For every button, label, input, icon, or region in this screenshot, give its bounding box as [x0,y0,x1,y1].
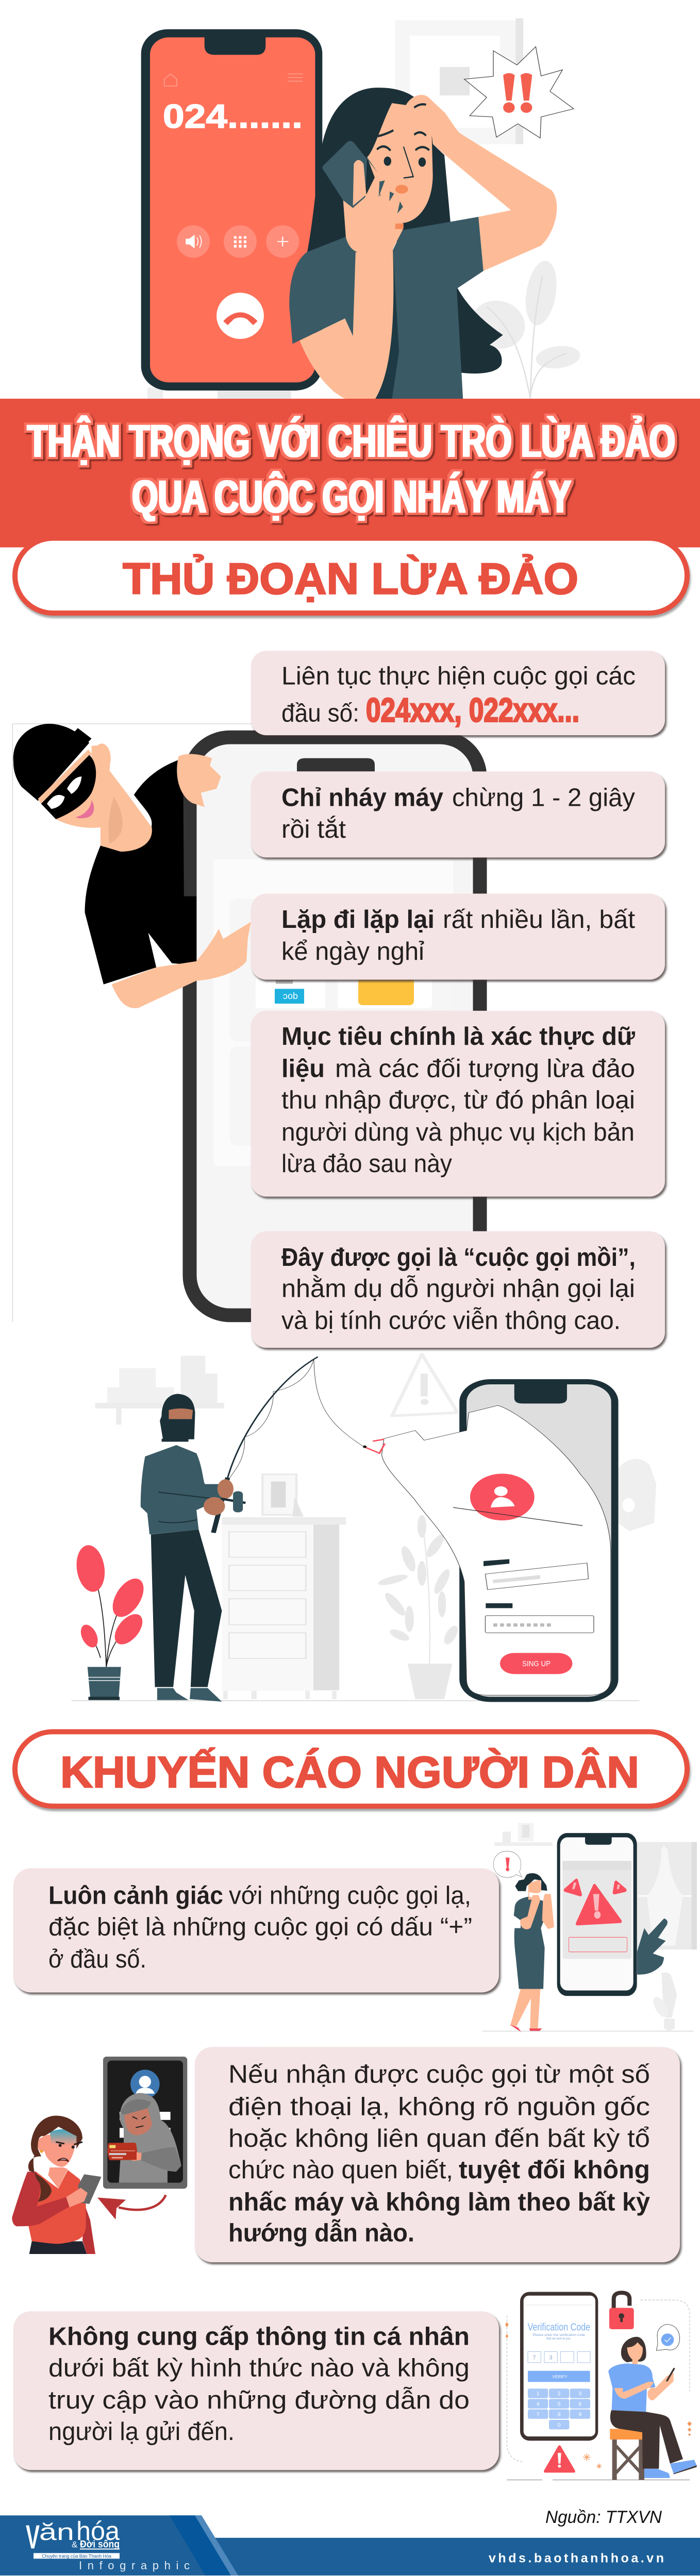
woman on the phone [289,88,557,399]
heading: scam tactics [15,538,687,613]
card: stay vigilant: Luôn cảnh giác [48,1881,223,1909]
card: unknown number warning: chức nào quen biết, [228,2155,453,2184]
card: unknown number warning: tuyệt đối không [459,2155,650,2184]
card: main goal: liệu [281,1054,325,1082]
card: unknown number warning: điện thoại lạ, không rõ nguồn gốc [228,2092,650,2121]
seated woman [507,2337,697,2480]
website url: vhds.baothanhhoa.vn [489,2551,664,2565]
card: unknown number warning: Nếu nhận được cuộc gọi từ một số [228,2060,650,2088]
source credit: Nguồn: TTXVN [545,2507,662,2527]
card: main goal: Mục tiêu chính là xác thực dữ [281,1022,635,1050]
phone with verification screen: Please enter the verification code [532,2333,585,2337]
illustration: masked thief peeking and pointing [13,724,251,1008]
illustration: scammer on tablet calling woman [12,2057,187,2254]
logo: Văn hóa & Đời sống: Chuyên trang của Báo Thanh Hóa [42,2553,111,2558]
phone with verification screen: that we sent to you [546,2337,571,2341]
logo: Văn hóa & Đời sống: V [26,2518,40,2556]
illustration: woman alarmed by phone warning [482,1823,697,2032]
arrow to victim [97,2195,166,2219]
card: main goal: mà các đối tượng lừa đảo [335,1054,635,1082]
hooked phone with peeled screen [363,1380,615,1700]
highlighted prefixes: 024xxx, 022xxx... [366,691,579,728]
logo: Văn hóa & Đời sống: ăn [39,2519,74,2545]
mirrored doc tag [275,989,304,1004]
card: do not share personal info: Không cung cấp thông tin cá nhân [48,2322,470,2350]
card: ring duration: rồi tắt [281,815,346,843]
card: bait call [251,1231,665,1348]
card: unknown number warning [195,2047,680,2262]
phone with verification screen: 5 [558,2401,561,2408]
logo: Văn hóa & Đời sống: Infographic [79,2559,190,2572]
mirrored doc tag: doc [283,991,298,1001]
heading: scam tactics: THỦ ĐOẠN LỪA ĐẢO [123,554,578,603]
card: do not share personal info: người lạ gửi đến. [48,2417,235,2446]
faded background frame and plant [147,18,582,399]
card: repetition: rất nhiều lần, bất [443,905,635,934]
phone with verification screen: 4 [537,2401,540,2408]
card: unknown number warning: nhấc máy và không làm theo bất kỳ [228,2188,650,2216]
logo: Văn hóa & Đời sống [26,2516,190,2572]
card: bait call: và bị tính cước viễn thông cao. [281,1306,621,1334]
phone with verification screen: 3 [578,2391,581,2397]
illustration: verification code phone and seated woman [505,2292,697,2480]
faded room background [72,1354,656,1701]
card: stay vigilant: ở đầu số. [48,1944,146,1973]
worried woman with phone [12,2115,102,2254]
dashed decoration [505,2300,692,2462]
heading: advice to citizens [15,1732,687,1806]
card: call pattern: đầu số: [281,699,359,727]
phone with verification screen: 1 [537,2391,540,2397]
card: do not share personal info: dưới bất kỳ hình thức nào và không [48,2353,470,2382]
card: bait call: Đây được gọi là “cuộc gọi mồi”, [281,1243,636,1272]
phone with verification screen: 8 [558,2412,561,2418]
card: stay vigilant [13,1868,499,1992]
tablet with hooded scammer [103,2057,187,2189]
phone with verification screen [520,2292,598,2441]
red potted plant [74,1545,150,1700]
card: stay vigilant: đặc biệt là những cuộc gọi có dấu “+” [48,1912,472,1941]
phone with incoming call [141,29,322,391]
phone with verification screen: VERIFY [553,2375,568,2379]
illustration: phone and worried woman [141,18,582,399]
phone with verification screen: 7 [537,2412,540,2418]
card: unknown number warning: hoặc không liên quan đến bất kỳ tổ [228,2124,650,2153]
card: repetition [251,894,665,980]
footer band [0,2515,700,2575]
button text: sign up: SING UP [522,1660,551,1668]
card: stay vigilant: với những cuộc gọi lạ, [229,1881,471,1909]
phone with verification screen: 0 [558,2422,561,2428]
logo: Văn hóa & Đời sống: Đời sống [80,2539,120,2550]
check bubble [656,2325,680,2350]
logo: Văn hóa & Đời sống: & [72,2540,77,2550]
illustration: thief phishing a phone [72,1354,656,1702]
phone with verification screen: Verification Code [528,2321,590,2333]
phone with verification screen: 7 [532,2354,536,2361]
card: do not share personal info: truy cập vào những đường dẫn do [48,2385,470,2414]
starburst with exclamation marks [464,47,574,138]
title banner [0,399,700,547]
card: main goal: thu nhập được, từ đó phân loại [281,1086,635,1114]
warning triangle [545,2447,602,2471]
logo: Văn hóa & Đời sống: hóa [76,2516,120,2546]
card: call pattern: Liên tục thực hiện cuộc gọi các [281,662,636,690]
card: unknown number warning: hướng dẫn nào. [228,2218,414,2247]
phone with verification screen: 3 [549,2354,553,2361]
heading: advice to citizens: KHUYẾN CÁO NGƯỜI DÂN [60,1748,639,1797]
thief with fishing rod [141,1357,364,1702]
card: ring duration: Chỉ nháy máy [281,783,443,811]
card: ring duration: chừng 1 - 2 giây [452,783,635,811]
phone with verification screen: 9 [578,2412,581,2418]
card: bait call: nhằm dụ dỗ người nhận gọi lại [281,1274,635,1302]
card: main goal: lừa đảo sau này [281,1149,452,1178]
card: ring duration [251,771,665,857]
card: repetition: Lặp đi lặp lại [281,905,435,934]
card: do not share personal info [13,2311,499,2470]
card: main goal [251,1011,665,1197]
card: call pattern [251,651,665,735]
phone with verification screen: 2 [558,2391,561,2397]
card: repetition: kể ngày nghỉ [281,937,424,965]
phone with verification screen: 6 [578,2401,581,2408]
open padlock [609,2293,634,2329]
card: main goal: người dùng và phục vụ kịch bản [281,1117,635,1146]
dialed number: 024....... [163,97,303,135]
illustration: large phone behind cards [12,724,480,1322]
